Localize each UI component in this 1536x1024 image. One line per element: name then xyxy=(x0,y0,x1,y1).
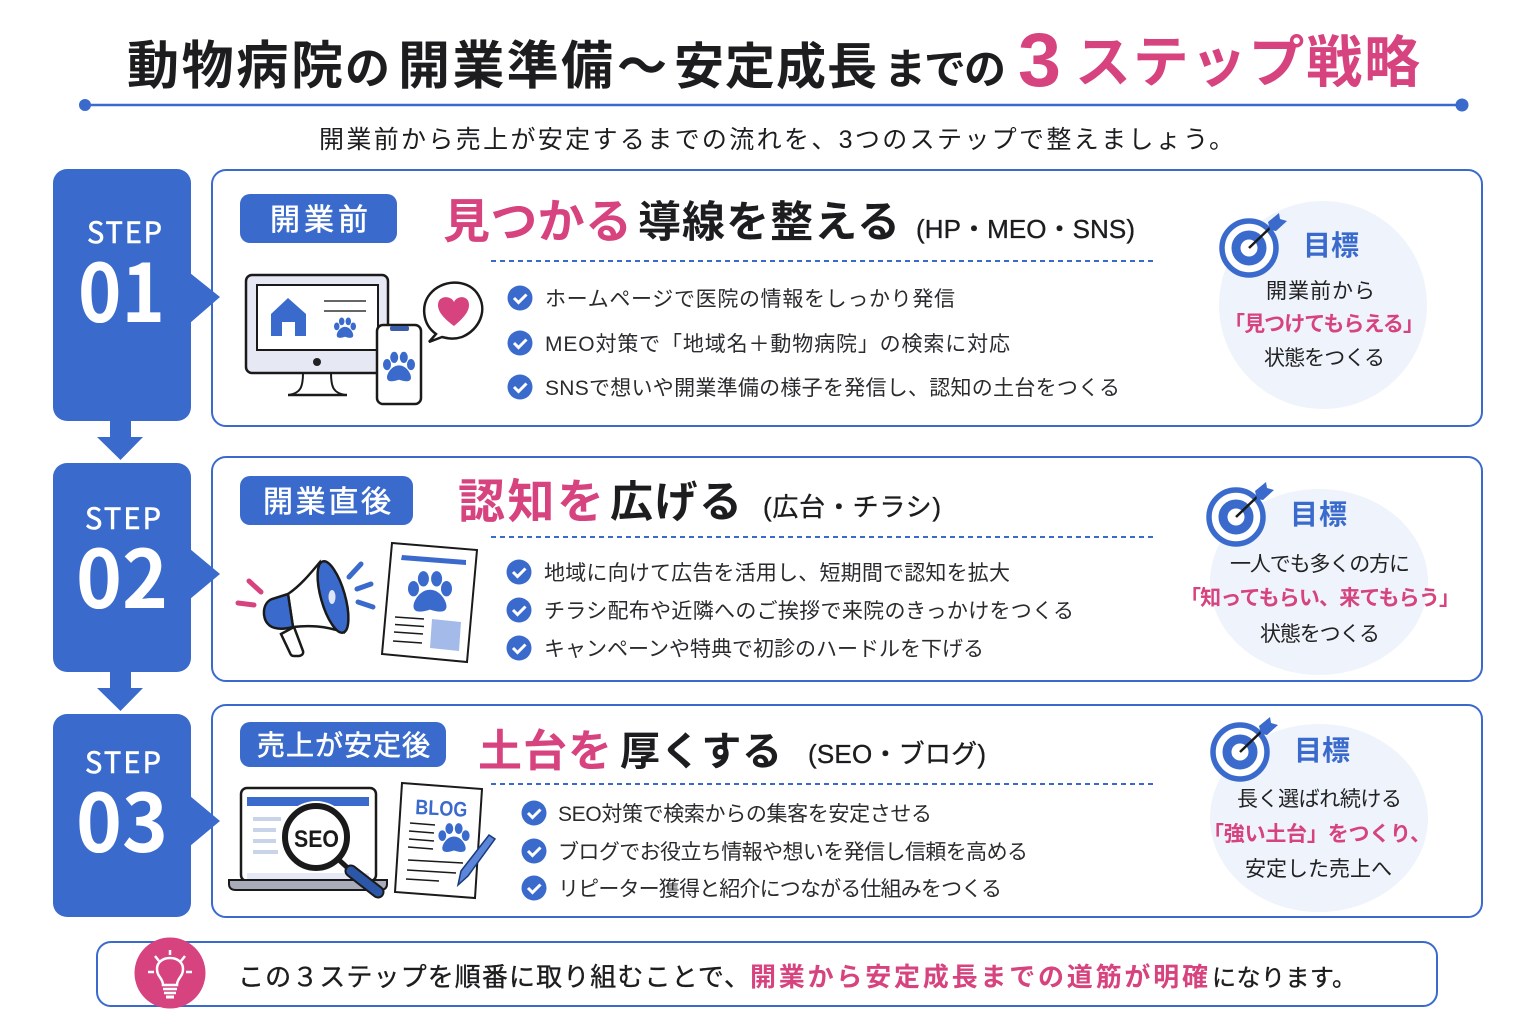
title: 3 xyxy=(1018,18,1061,103)
bullet list: step 2 xyxy=(506,560,1074,661)
goal: step 1 xyxy=(1219,201,1427,409)
icon: target xyxy=(1213,717,1278,779)
icon: laptop with SEO magnifier xyxy=(229,788,387,892)
title: 安定成長 xyxy=(674,39,877,95)
icon: laptop with SEO magnifier: SEO xyxy=(294,826,339,853)
heading: step 3: 土台を xyxy=(478,727,612,776)
title: 動物病院 xyxy=(127,38,343,96)
title underline xyxy=(79,98,1468,112)
icon: light bulb xyxy=(134,938,206,1008)
step 01 marker xyxy=(53,169,220,421)
phase label: 開業直後 xyxy=(240,476,413,525)
heading: step 1 xyxy=(443,195,1135,248)
step 03 marker: STEP xyxy=(85,740,161,782)
heading: step 2: 広げる xyxy=(610,479,742,527)
icon: monitor, phone and heart bubble xyxy=(246,275,482,404)
bullet list: step 2: 地域に向けて広告を活用し、短期間で認知を拡大 xyxy=(544,562,1010,585)
goal: step 3: 安定した売上へ xyxy=(1245,858,1392,881)
callout: summary xyxy=(97,938,1437,1008)
bullet list: step 1: MEO対策で「地域名＋動物病院」の検索に対応 xyxy=(545,333,1010,356)
heading: step 2: 認知を xyxy=(458,475,604,528)
goal: step 3: 長く選ばれ続ける xyxy=(1237,788,1402,811)
summary text: この３ステップを順番に取り組むことで、 xyxy=(238,962,750,992)
goal: step 1: 状態をつくる xyxy=(1264,347,1385,370)
step 01 marker: STEP xyxy=(87,210,162,252)
goal: step 3: 「強い土台」をつくり、 xyxy=(1203,823,1431,846)
bullet list: step 1: SNSで想いや開業準備の様子を発信し、認知の土台をつくる xyxy=(545,377,1120,400)
goal: step 1: 開業前から xyxy=(1266,280,1375,303)
goal: step 2: 「知ってもらい、来てもらう」 xyxy=(1180,587,1460,610)
bullet list: step 1: ホームページで医院の情報をしっかり発信 xyxy=(545,288,955,311)
step 01 marker: 01 xyxy=(78,230,165,346)
phase label: 開業直後: 開業直後 xyxy=(263,486,391,519)
arrow: step 02 to 03 xyxy=(97,672,143,711)
heading: step 1: 導線を整える xyxy=(638,199,900,247)
step 03 marker xyxy=(53,714,220,917)
heading: step 1: 見つかる xyxy=(443,195,632,248)
heading: step 3: (SEO・ブログ) xyxy=(808,739,986,769)
icon: target xyxy=(1209,482,1274,544)
heading: step 3: 厚くする xyxy=(620,730,782,774)
heading: step 2: (広台・チラシ) xyxy=(763,492,941,522)
goal: step 2: 目標 xyxy=(1290,499,1347,530)
goal: step 2 xyxy=(1180,482,1460,675)
icon: target xyxy=(1222,213,1287,275)
goal: step 1: 「見つけてもらえる」 xyxy=(1224,313,1424,336)
icon: blog document with pen xyxy=(395,783,495,898)
step 02 marker xyxy=(53,463,220,672)
summary text: 開業から安定成長までの道筋が明確 xyxy=(750,962,1208,992)
heading: step 1: (HP・MEO・SNS) xyxy=(916,214,1135,244)
phase label: 開業前: 開業前 xyxy=(270,204,368,237)
icon: megaphone xyxy=(238,558,373,656)
heading: step 3 xyxy=(478,727,986,776)
summary text: になります。 xyxy=(1212,965,1356,992)
phase label: 売上が安定後 xyxy=(240,722,446,767)
title: 開業準備 xyxy=(398,38,613,96)
heading: step 2 xyxy=(458,475,941,528)
step 03 marker: 03 xyxy=(76,760,168,876)
title xyxy=(127,18,1420,103)
title: 〜 xyxy=(617,39,667,95)
panel: step 1 xyxy=(212,170,1482,426)
bullet list: step 2: チラシ配布や近隣へのご挨拶で来院のきっかけをつくる xyxy=(544,600,1074,623)
bullet list: step 1 xyxy=(508,286,1120,400)
phase label: 開業前 xyxy=(240,194,397,243)
goal: step 1: 目標 xyxy=(1303,230,1359,261)
bullet list: step 3: ブログでお役立ち情報や想いを発信し信頼を高める xyxy=(558,841,1028,864)
goal: step 3 xyxy=(1203,717,1431,912)
bullet list: step 3: SEO対策で検索からの集客を安定させる xyxy=(558,803,932,826)
title: の xyxy=(345,43,390,94)
step 02 marker: 02 xyxy=(76,516,168,632)
phase label: 売上が安定後: 売上が安定後 xyxy=(257,730,430,761)
step 02 marker: STEP xyxy=(85,496,161,538)
title: ステップ戦略 xyxy=(1075,31,1420,94)
arrow: step 01 to 02 xyxy=(97,421,143,460)
subtitle: 開業前から売上が安定するまでの流れを、3つのステップで整えましょう。 xyxy=(319,126,1234,154)
panel: step 3 xyxy=(212,705,1482,917)
bullet list: step 3 xyxy=(522,800,1028,901)
goal: step 3: 目標 xyxy=(1294,735,1350,766)
bullet list: step 2: キャンペーンや特典で初診のハードルを下げる xyxy=(544,638,984,661)
title: までの xyxy=(884,46,1006,93)
summary text xyxy=(238,962,1356,992)
icon: flyer xyxy=(382,543,477,662)
goal: step 2: 一人でも多くの方に xyxy=(1230,553,1410,576)
icon: blog document with pen: BLOG xyxy=(415,796,468,822)
panel: step 2 xyxy=(212,457,1482,681)
goal: step 2: 状態をつくる xyxy=(1260,623,1380,646)
bullet list: step 3: リピーター獲得と紹介につながる仕組みをつくる xyxy=(558,878,1002,901)
